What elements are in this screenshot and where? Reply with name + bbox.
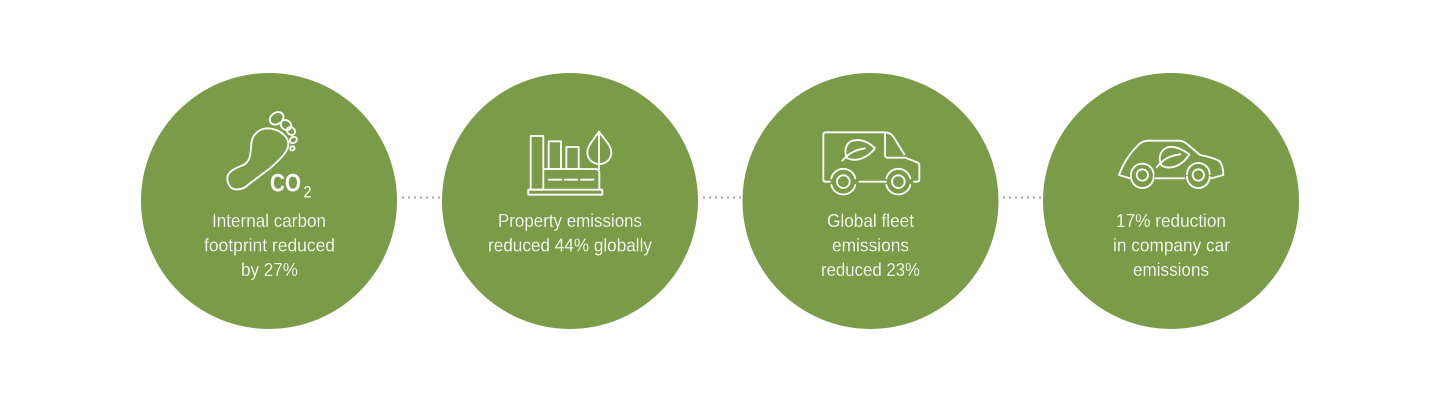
caption: [488, 211, 652, 256]
connector: dotted line 2: [703, 196, 742, 198]
caption: [1113, 211, 1230, 280]
circle background: [442, 73, 698, 329]
connector: dotted line 3: [1003, 196, 1042, 198]
caption: [204, 211, 335, 280]
panel: property emissions: [442, 73, 698, 329]
caption: in company car: [1113, 236, 1230, 256]
connector: dotted line 1: [402, 196, 441, 198]
panel: internal carbon footprint: [141, 73, 397, 329]
CO2 label: CO: [270, 170, 301, 198]
caption: reduced 23%: [821, 260, 920, 280]
caption: 17% reduction: [1116, 211, 1226, 231]
icon: car with leaf: [1119, 141, 1223, 188]
icon: footprint with CO2: [227, 109, 312, 202]
caption: footprint reduced: [204, 236, 335, 256]
panel: global fleet emissions: [742, 73, 998, 329]
icon: factory with drop: [528, 132, 611, 195]
caption: Global fleet: [827, 211, 914, 231]
icon: van with leaf: [823, 132, 919, 194]
caption: Property emissions: [498, 211, 642, 231]
caption: emissions: [1133, 260, 1209, 280]
circle background: [1043, 73, 1299, 329]
CO2 subscript: 2: [304, 182, 312, 202]
caption: [821, 211, 920, 280]
caption: by 27%: [241, 260, 298, 280]
caption: emissions: [832, 236, 909, 256]
caption: Internal carbon: [212, 211, 326, 231]
circle background: [141, 73, 397, 329]
circle background: [742, 73, 998, 329]
panel: company car emissions: [1043, 73, 1299, 329]
caption: reduced 44% globally: [488, 236, 652, 256]
